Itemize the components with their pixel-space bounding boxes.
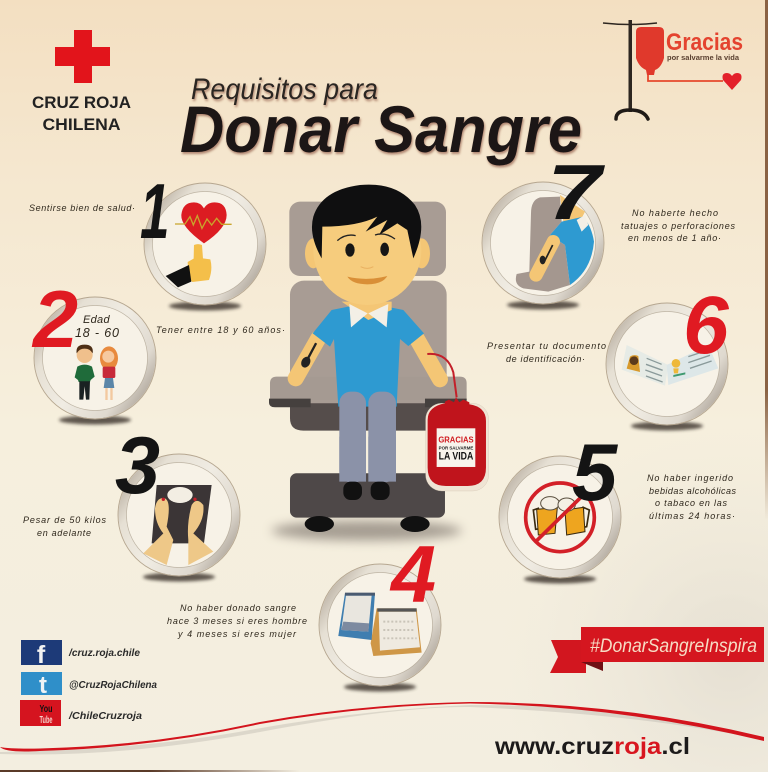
social: youtube: You [40, 704, 52, 715]
hashtag banner [550, 627, 764, 673]
requirement 5: no alcohol: No haber ingerido [647, 473, 733, 483]
social: twitter [21, 672, 157, 699]
title: Requisitos para [191, 73, 378, 106]
icon: man and woman [75, 345, 118, 400]
requirement 2: age: Tener entre 18 y 60 años· [156, 325, 285, 335]
requirement 5: no alcohol: o tabaco en las [655, 498, 728, 508]
social: youtube [20, 700, 142, 726]
requirement 7: no tattoos: en menos de 1 año· [628, 233, 721, 243]
icon: feet on scale [143, 485, 213, 565]
requirement 2: age: Edad [83, 314, 110, 326]
social: youtube: /ChileCruzroja [68, 710, 142, 722]
requirement 7: no tattoos: No haberte hecho [632, 208, 718, 218]
icon: blood bag: POR SALVARME [439, 445, 473, 450]
requirement 2: age [31, 275, 285, 424]
logo: Cruz Roja Chilena: CRUZ ROJA [32, 93, 131, 112]
social: twitter: t [39, 672, 47, 699]
requirement 3: weight: Pesar de 50 kilos [23, 515, 106, 525]
icon: arm with tattoo in chair [516, 195, 594, 292]
requirement 7: no tattoos: tatuajes o perforaciones [621, 221, 736, 231]
central figure: donor on chair [269, 185, 467, 541]
icon: IV stand with Gracias message: por salvarme la vida [667, 53, 740, 62]
social: facebook: /cruz.roja.chile [68, 647, 140, 659]
hashtag banner: #DonarSangreInspira [590, 636, 757, 657]
requirement 5: no alcohol: 5 [572, 428, 618, 518]
title: Donar Sangre [180, 92, 582, 166]
requirement 5: no alcohol: bebidas alcohólicas [649, 486, 736, 496]
requirement 7: no tattoos: 7 [547, 148, 606, 236]
social: facebook: f [37, 641, 46, 669]
icon: blood bag: LA VIDA [439, 451, 474, 463]
requirement 4: calendars: hace 3 meses si eres hombre [167, 616, 307, 626]
requirement 7: no tattoos [482, 148, 736, 310]
icon: identity cards [622, 345, 718, 386]
social: twitter: @CruzRojaChilena [69, 679, 157, 691]
requirement 5: no alcohol: últimas 24 horas· [649, 511, 735, 521]
requirement 5: no alcohol [499, 428, 736, 584]
icon: prohibited beer [526, 483, 594, 552]
requirement 2: age: 2 [31, 275, 78, 365]
social: facebook [21, 640, 140, 669]
icon: heart and thumb up [166, 202, 232, 287]
requirement 6: ID document: Presentar tu documento [487, 341, 606, 351]
website url: www.cruz roja.cl [494, 733, 690, 759]
requirement 1: feeling well: 1 [140, 169, 169, 256]
requirement 6: ID document: de identificación· [506, 354, 585, 364]
requirement 6: ID document: 6 [683, 280, 730, 371]
logo: Cruz Roja Chilena [32, 30, 131, 134]
icon: IV stand with Gracias message [603, 20, 743, 119]
requirement 2: age: 18 - 60 [75, 326, 119, 340]
requirement 4: calendars [167, 530, 441, 692]
requirement 1: feeling well: Sentirse bien de salud· [29, 203, 135, 213]
requirement 1: feeling well [29, 169, 266, 310]
icon: IV stand with Gracias message: Gracias [666, 29, 743, 56]
decorative swoosh [0, 702, 764, 755]
requirement 6: ID document [487, 280, 730, 430]
requirement 3: weight [23, 421, 240, 582]
logo: Cruz Roja Chilena: CHILENA [42, 115, 120, 134]
icon: blood bag: GRACIAS [438, 435, 474, 445]
requirement 4: calendars: y 4 meses si eres mujer [177, 629, 297, 639]
requirement 4: calendars: No haber donado sangre [180, 603, 296, 613]
requirement 3: weight: 3 [115, 421, 160, 511]
icon: desk calendars [338, 593, 422, 656]
icon: blood bag [426, 354, 489, 491]
requirement 4: calendars: 4 [389, 530, 436, 620]
social: youtube: Tube [40, 715, 53, 726]
requirement 3: weight: en adelante [37, 528, 91, 538]
